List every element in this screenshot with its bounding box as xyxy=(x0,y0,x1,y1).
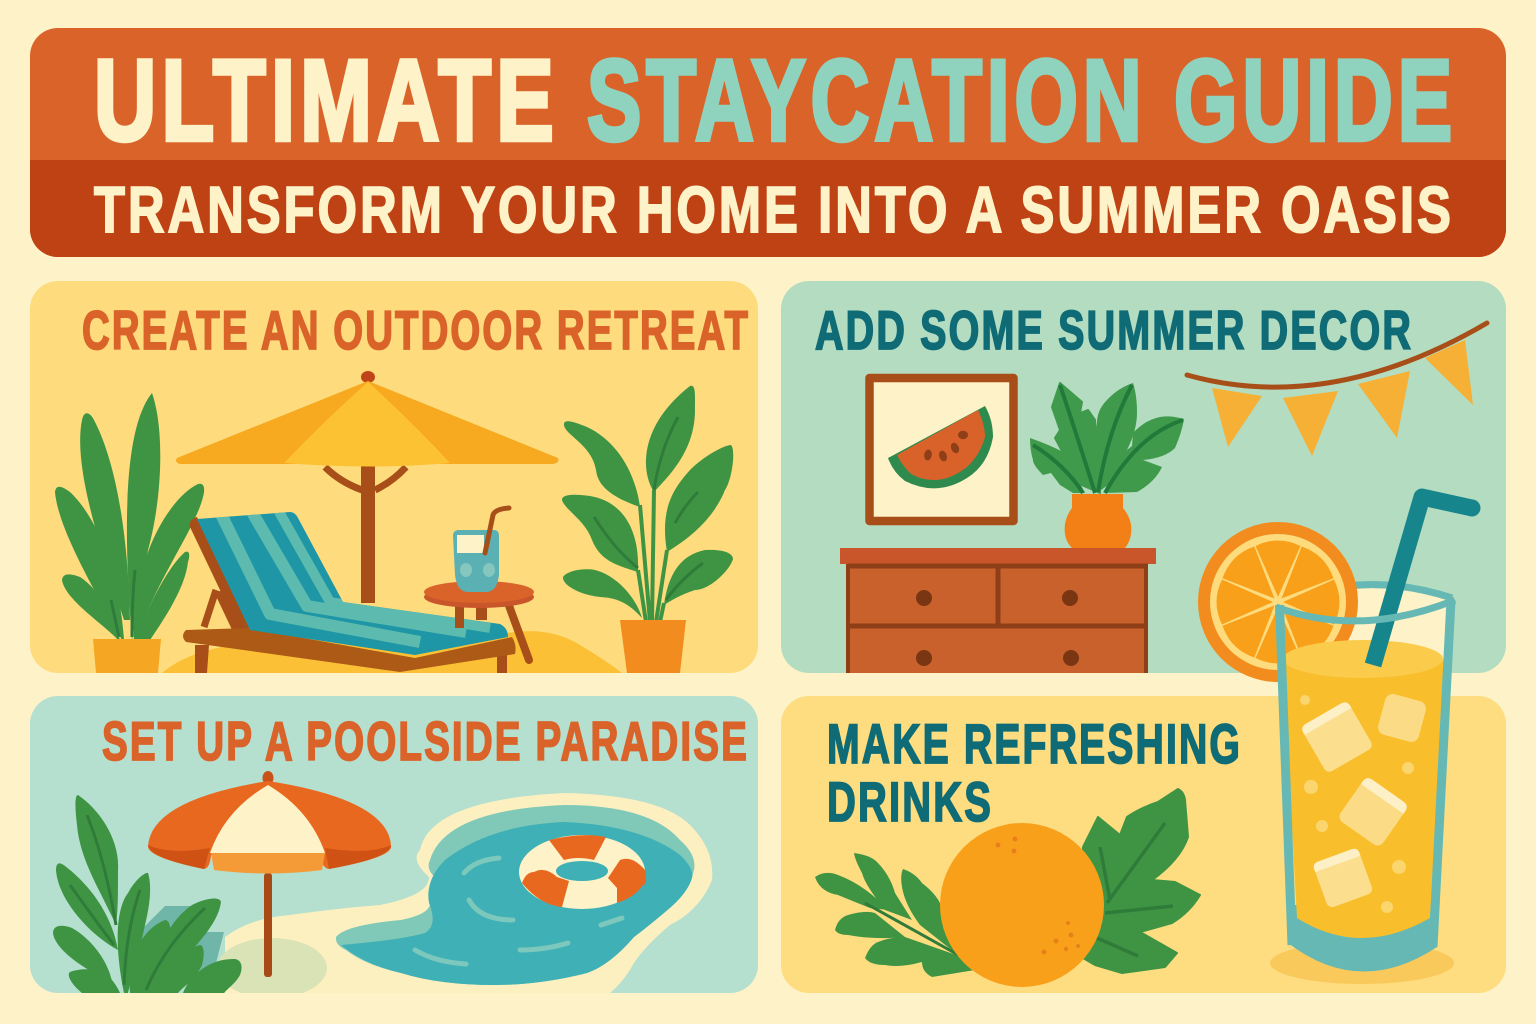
title: ULTIMATE xyxy=(94,37,559,165)
panel: refreshing drinks xyxy=(781,696,1506,993)
sand shadow patch xyxy=(217,938,327,998)
ice cubes xyxy=(1300,692,1428,909)
sand path xyxy=(225,793,712,993)
icon: left potted plant xyxy=(55,393,204,673)
icon: life ring xyxy=(519,835,646,909)
icon: right potted plant xyxy=(562,386,733,673)
sand mound xyxy=(162,631,622,673)
icon: poolside plant xyxy=(53,795,242,993)
header banner xyxy=(30,28,1506,257)
icon: dresser xyxy=(840,548,1156,673)
glass base xyxy=(1288,905,1437,972)
panel: outdoor retreat xyxy=(30,281,758,673)
icon: beach umbrella xyxy=(148,771,391,977)
icon: orange juice glass with slice and straw xyxy=(1198,497,1480,984)
icon: orange fruit xyxy=(940,823,1104,987)
icon: sun lounger xyxy=(183,510,516,673)
icon: swimming pool xyxy=(336,805,694,985)
icon: side table with drink xyxy=(424,508,534,660)
panel: summer decor xyxy=(781,281,1506,673)
panel: poolside paradise xyxy=(30,696,758,998)
icon: citrus leaves left xyxy=(815,853,975,977)
title xyxy=(94,37,1457,165)
straw xyxy=(1373,497,1472,665)
heading: set up a poolside paradise: SET UP A POOLSIDE PARADISE xyxy=(102,710,749,772)
icon: citrus leaf right xyxy=(1083,789,1200,973)
icon: decor plant in vase xyxy=(1030,383,1184,548)
icon: watermelon picture frame xyxy=(870,378,1014,521)
heading: make refreshing drinks xyxy=(827,712,1242,833)
heading: create an outdoor retreat: CREATE AN OUTDOOR RETREAT xyxy=(82,299,750,361)
icon: orange slice xyxy=(1198,522,1358,682)
glass walls xyxy=(1276,600,1455,947)
heading: make refreshing drinks: MAKE REFRESHING xyxy=(827,712,1242,775)
juice xyxy=(1283,643,1445,938)
heading: make refreshing drinks: DRINKS xyxy=(827,770,993,833)
icon: bunting xyxy=(1187,323,1487,456)
icon: yellow patio umbrella xyxy=(176,371,558,603)
bubbles xyxy=(1300,695,1414,913)
